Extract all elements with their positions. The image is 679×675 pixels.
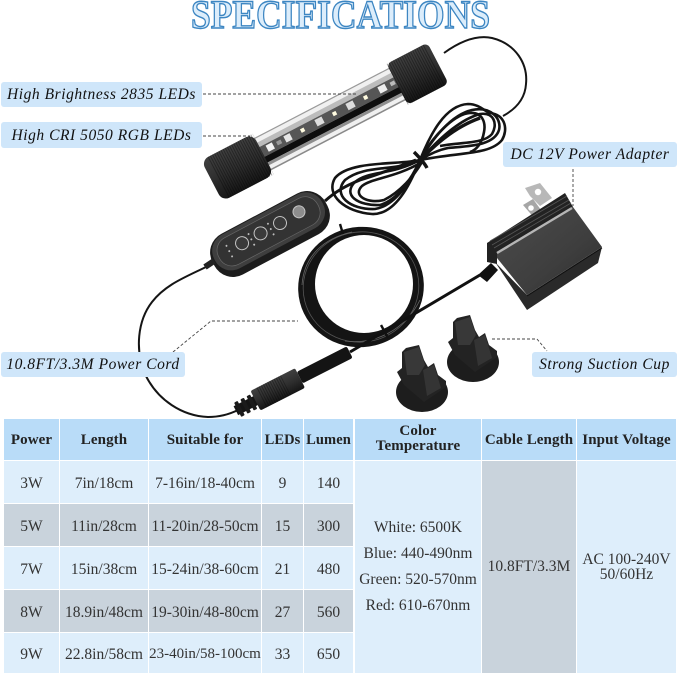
label: high brightness LEDs: High Brightness 2835 LEDs bbox=[7, 86, 196, 103]
suction cup left bbox=[396, 345, 448, 412]
specifications table: Cable Length bbox=[485, 432, 573, 448]
specifications table: Suitable for bbox=[167, 432, 243, 448]
specifications table: Color bbox=[399, 422, 437, 438]
specifications table: 9 bbox=[279, 475, 286, 492]
adapter body bbox=[497, 207, 602, 295]
specifications table: 23-40in/58-100cm bbox=[149, 646, 261, 662]
power adapter bbox=[478, 183, 602, 310]
controller bbox=[203, 184, 337, 284]
specifications table: 7in/18cm bbox=[75, 475, 133, 492]
indicator dots bbox=[225, 222, 275, 258]
specifications table: Length bbox=[81, 432, 127, 448]
plug prongs bbox=[525, 183, 552, 206]
specifications table: Input Voltage bbox=[582, 432, 671, 448]
tube glass bbox=[252, 66, 409, 171]
LED chips bbox=[266, 79, 397, 152]
specifications table: Power bbox=[11, 432, 52, 448]
specifications table: Blue: 440-490nm bbox=[364, 544, 472, 562]
specifications table: Lumen bbox=[306, 432, 351, 448]
specifications table: AC 100-240V bbox=[582, 550, 671, 568]
specifications table: Red: 610-670nm bbox=[366, 596, 470, 614]
label: high CRI LEDs bbox=[1, 122, 202, 148]
specifications table: 15 bbox=[275, 518, 290, 535]
label: suction cup: Strong Suction Cup bbox=[539, 356, 670, 373]
label: suction cup bbox=[532, 352, 677, 377]
buttons bbox=[233, 204, 308, 252]
specifications table: 33 bbox=[275, 646, 290, 663]
label: power adapter: DC 12V Power Adapter bbox=[511, 146, 669, 163]
specifications table: 480 bbox=[317, 561, 340, 578]
specifications table: 27 bbox=[275, 604, 290, 621]
LED tube light bbox=[201, 43, 449, 201]
adapter underside bbox=[495, 247, 602, 310]
right end cap bbox=[387, 43, 449, 105]
label: high brightness LEDs bbox=[1, 82, 202, 107]
specifications table: Temperature bbox=[376, 438, 460, 454]
specifications table: 15in/38cm bbox=[71, 561, 137, 578]
specifications table: 7-16in/18-40cm bbox=[155, 475, 255, 492]
product illustration bbox=[138, 36, 602, 418]
specifications table: LEDs bbox=[265, 432, 300, 448]
adapter collar bbox=[478, 263, 498, 282]
specifications table: 11in/28cm bbox=[71, 518, 137, 535]
dashed leader lines bbox=[173, 94, 573, 352]
left end cap bbox=[201, 134, 274, 201]
controller strain relief bbox=[205, 261, 214, 267]
specifications table: 300 bbox=[317, 518, 340, 535]
suction cup right bbox=[447, 315, 499, 382]
label: power cord bbox=[1, 352, 185, 377]
specifications table: 140 bbox=[317, 475, 340, 492]
specifications table: 18.9in/48cm bbox=[65, 604, 143, 621]
specifications table: 11-20in/28-50cm bbox=[151, 518, 259, 535]
specifications table: 19-30in/48-80cm bbox=[151, 604, 259, 621]
specifications table: 9W bbox=[20, 646, 43, 663]
specifications table: 8W bbox=[20, 604, 43, 621]
coiled power cord bbox=[285, 214, 437, 360]
label: power adapter bbox=[503, 142, 677, 167]
specifications table: 10.8FT/3.3M bbox=[488, 558, 570, 575]
specifications table: 22.8in/58cm bbox=[65, 646, 143, 663]
cable to adapter bbox=[350, 275, 480, 352]
specifications table bbox=[4, 419, 676, 673]
specifications table: 560 bbox=[317, 604, 340, 621]
label: high CRI LEDs: High CRI 5050 RGB LEDs bbox=[11, 126, 192, 144]
barrel connector bbox=[231, 343, 355, 420]
bundled cord loops bbox=[325, 104, 505, 214]
specifications table: Green: 520-570nm bbox=[359, 570, 477, 588]
specifications table: 15-24in/38-60cm bbox=[151, 561, 259, 578]
label: power cord: 10.8FT/3.3M Power Cord bbox=[6, 356, 180, 373]
cord from lamp to coil bbox=[444, 37, 526, 116]
specifications table: 50/60Hz bbox=[600, 566, 653, 582]
specifications table: 21 bbox=[275, 561, 290, 578]
adapter top ridges bbox=[487, 193, 573, 264]
lower cord bbox=[139, 266, 238, 417]
specifications table: 5W bbox=[20, 518, 43, 535]
specifications table: 7W bbox=[20, 561, 43, 578]
specifications table: 650 bbox=[317, 646, 340, 663]
specifications table: 3W bbox=[20, 475, 43, 492]
specifications table: White: 6500K bbox=[374, 518, 462, 536]
